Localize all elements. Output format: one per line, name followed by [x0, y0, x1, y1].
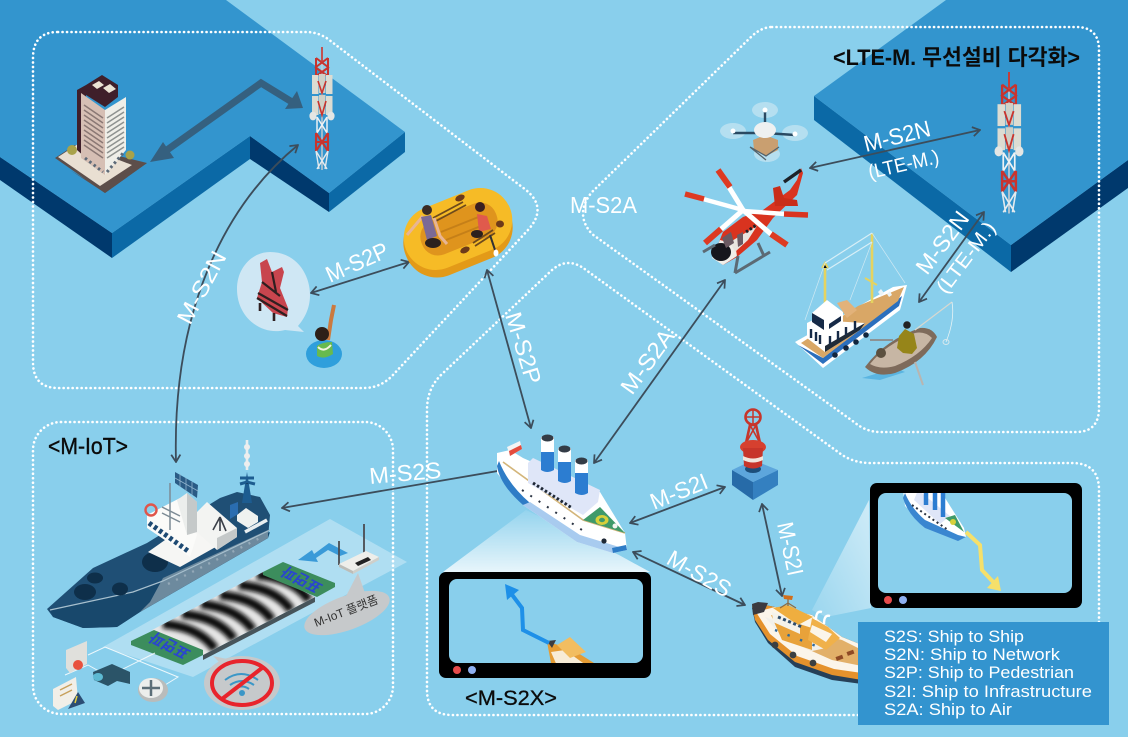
icon: electric panel with warning — [53, 677, 85, 710]
label: M-S2N LTE-M drone: M-S2N — [861, 115, 933, 157]
label: M-S2N LTE-M drone — [861, 115, 941, 184]
panel text far: 표면파 — [278, 563, 327, 595]
title: M-S2X: <M-S2X> — [465, 687, 557, 710]
label: M-S2N LTE-M fishing boat — [910, 206, 1001, 298]
legend text: S2S: Ship to Ship — [884, 628, 1024, 646]
legend text: S2N: Ship to Network — [884, 646, 1061, 664]
legend text: S2A: Ship to Air — [884, 701, 1013, 719]
arrow: M-S2N LTE drone — [810, 130, 980, 168]
label: M-S2S ship to ship: M-S2S — [662, 545, 736, 602]
screen: left route display — [439, 572, 651, 678]
callout: M-IoT platform: M-IoT 플랫폼 — [312, 593, 380, 630]
dotted zone: M-S2N / M-S2P — [33, 32, 538, 388]
icon: fishing boat — [795, 233, 907, 368]
arrow: M-S2A ship to helicopter — [594, 280, 725, 463]
arrow: M-S2I ship to buoy — [630, 487, 725, 523]
icon: orange ship — [752, 595, 862, 684]
light cone from ship to left screen — [443, 510, 650, 572]
left land block — [0, 0, 405, 258]
dotted zone: LTE-M — [583, 27, 1099, 432]
label: M-S2A left: M-S2A — [570, 192, 638, 218]
icon: cell tower left — [309, 47, 335, 170]
right land block — [814, 0, 1128, 272]
thick arrow between building and tower — [150, 83, 303, 162]
arrow: M-S2P ship to raft — [487, 270, 531, 428]
arrow: blue router arrow — [298, 543, 348, 562]
legend box — [858, 622, 1109, 725]
screen: right route display — [870, 483, 1082, 608]
legend text — [884, 628, 1092, 719]
label: M-S2N LTE-M drone: (LTE-M.) — [866, 146, 941, 184]
surface wave band — [152, 572, 315, 660]
mini passenger ship in screen — [903, 490, 966, 541]
callout: no wifi — [204, 656, 280, 710]
callout: M-IoT platform — [299, 573, 395, 644]
label: M-S2N LTE-M fishing boat: M-S2N — [910, 206, 974, 279]
arrow: M-S2N LTE fishing boat — [919, 212, 984, 302]
dotted zone: M-S2X — [427, 263, 1099, 715]
title: LTE-M: <LTE-M. 무선설비 다각화> — [833, 45, 1080, 70]
arrow: M-S2S ship to ship — [282, 468, 515, 508]
label: M-S2A diagonal: M-S2A — [615, 323, 680, 399]
icon: drone — [720, 102, 808, 162]
arrow: M-S2I buoy to orange ship — [762, 504, 782, 596]
mini orange ship in screen — [547, 637, 594, 663]
legend text: S2P: Ship to Pedestrian — [884, 664, 1074, 682]
label: M-S2I buoy to ship: M-S2I — [772, 520, 809, 578]
icon: alarm box — [66, 641, 87, 673]
arrow: M-S2S ship to orange ship — [633, 552, 745, 605]
icon: wireless router — [339, 524, 379, 574]
icon: swimmer in water — [306, 305, 342, 368]
arrow: M-S2P pedestrian — [311, 262, 409, 293]
label: M-S2N left: M-S2N — [171, 246, 232, 328]
icon: smoke detector — [138, 678, 168, 702]
icon: sea buoy — [732, 410, 778, 500]
surface wave panel far — [263, 562, 335, 597]
title: M-IoT: <M-IoT> — [48, 433, 128, 459]
icon: building on land — [55, 75, 147, 193]
panel text: 표면파 — [146, 629, 195, 661]
light cone from orange ship to right screen — [812, 500, 871, 617]
icon: life jacket speech bubble — [237, 252, 310, 332]
label: M-S2P pedestrian: M-S2P — [321, 237, 392, 288]
label: M-S2P long: M-S2P — [500, 309, 547, 387]
icon: inflatable raft — [393, 178, 523, 288]
icon: rescue helicopter — [685, 168, 808, 273]
icon: passenger ship — [497, 434, 627, 553]
icon: surveillance camera — [93, 664, 130, 686]
arrow: M-S2N to M-IoT ship — [176, 145, 298, 462]
label: M-S2I ship to buoy: M-S2I — [646, 468, 712, 515]
sensor connector lines — [65, 647, 178, 685]
light plane under M-IoT ship — [103, 519, 407, 677]
icon: rowboat with fisher — [862, 302, 953, 385]
label: M-S2N LTE-M fishing boat: (LTE-M.) — [932, 218, 1001, 298]
icon: cell tower right — [995, 72, 1023, 213]
legend text: S2I: Ship to Infrastructure — [884, 683, 1092, 701]
surface wave panel near — [131, 629, 203, 665]
arrow: blue route on left screen — [505, 584, 549, 643]
label: M-S2S left: M-S2S — [368, 457, 442, 489]
arrow: yellow route on right screen — [966, 532, 1001, 591]
dotted zone: M-IoT — [33, 422, 393, 714]
icon: M-IoT research ship — [47, 440, 270, 628]
